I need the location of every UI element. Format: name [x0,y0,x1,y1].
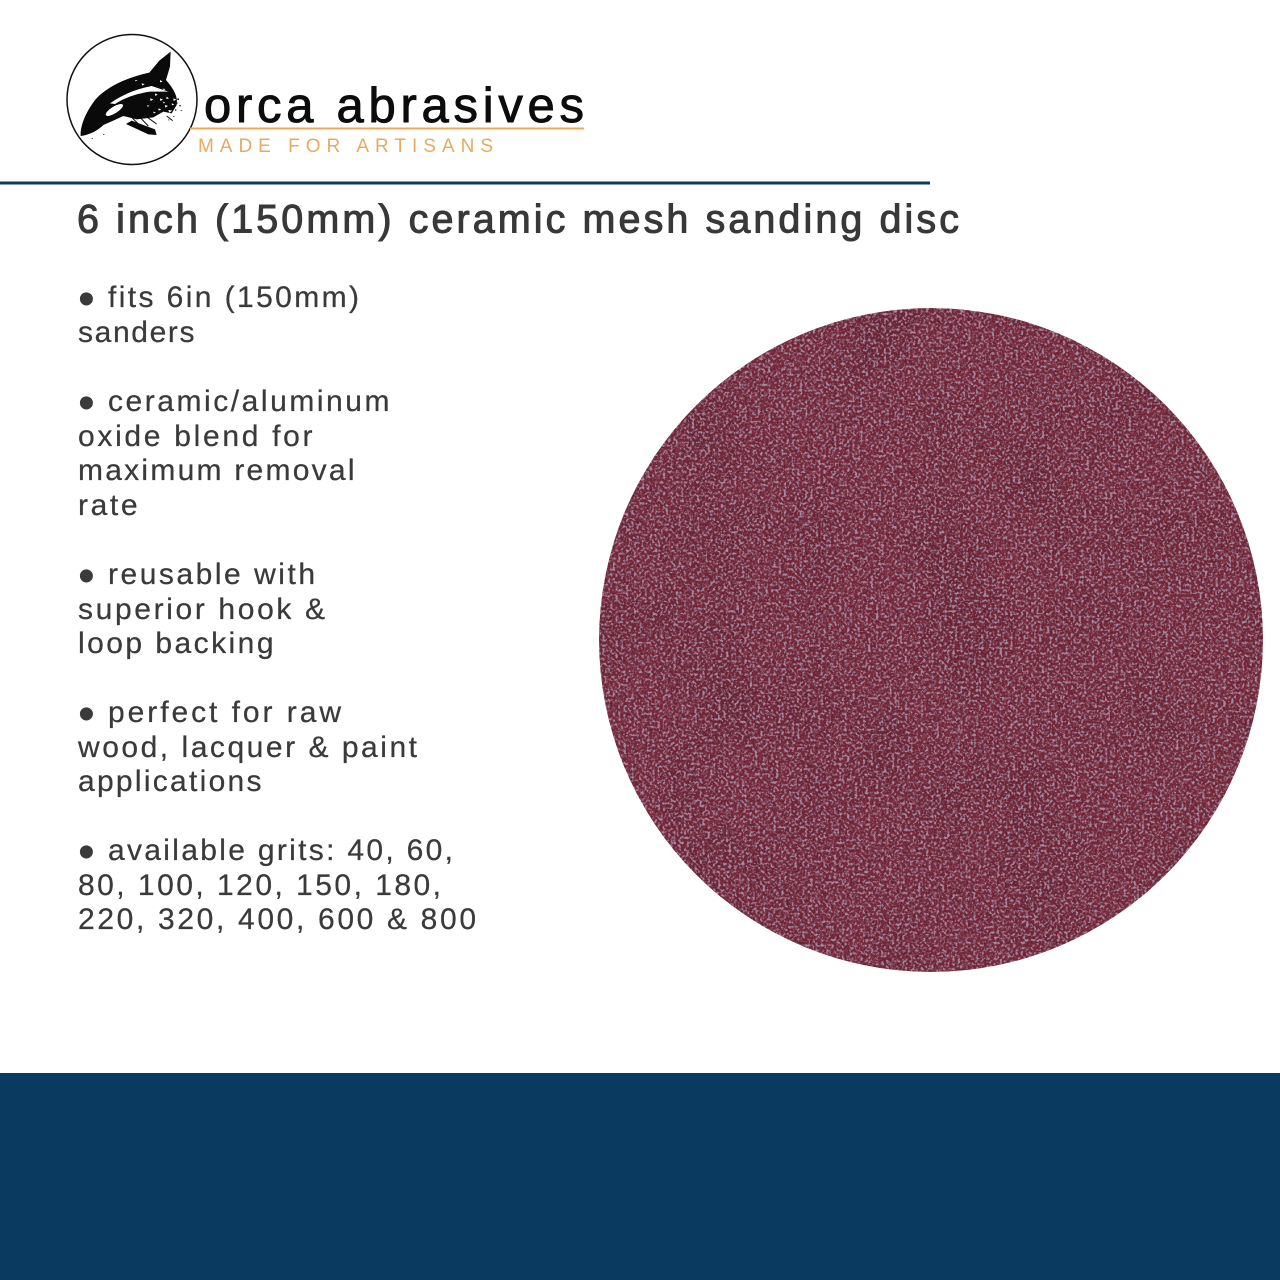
bullet: fit: sanders [78,316,194,349]
bullet: grits: 80, 100, 120, 150, 180, [78,869,441,902]
tagline: MADE FOR ARTISANS [198,136,493,157]
bullet: fit: • [78,273,95,326]
product image: sanding disc [599,308,1263,972]
title: 6 inch (150mm) ceramic mesh sanding disc [77,198,959,242]
bullet: material: maximum removal [78,454,354,487]
bullet: grits [78,826,476,936]
bullet: grits: 220, 320, 400, 600 & 800 [78,903,476,936]
bullet: material [78,377,390,522]
bullet: applications: applications [78,765,262,798]
logo badge: orca in circle [67,34,197,164]
bullet: material: ceramic/aluminum [108,385,390,418]
orange underline [190,128,584,130]
bullet: applications: • [78,688,95,741]
bullet: grits: available grits: 40, 60, [108,834,453,867]
bullet: applications: perfect for raw [108,696,341,729]
bullet: grits: • [78,826,95,879]
bullet: applications [77,688,418,798]
bullet: backing [78,550,325,660]
header rule [0,182,930,184]
brand name: orca abrasives [204,79,584,133]
bullet: material: oxide blend for [78,420,312,453]
bullet: backing: reusable with [108,558,315,591]
bullet: backing: • [78,550,95,603]
logo [67,34,584,164]
bullet: backing: loop backing [78,627,274,660]
bullet: material: • [78,377,95,430]
bullet: fit: fits 6in (150mm) [108,281,359,314]
feature list [77,273,476,936]
footer band [0,1073,1280,1280]
bullet: applications: wood, lacquer & paint [77,731,418,764]
bullet: fit [78,273,359,349]
bullet: backing: superior hook & [78,593,325,626]
bullet: material: rate [78,489,138,522]
